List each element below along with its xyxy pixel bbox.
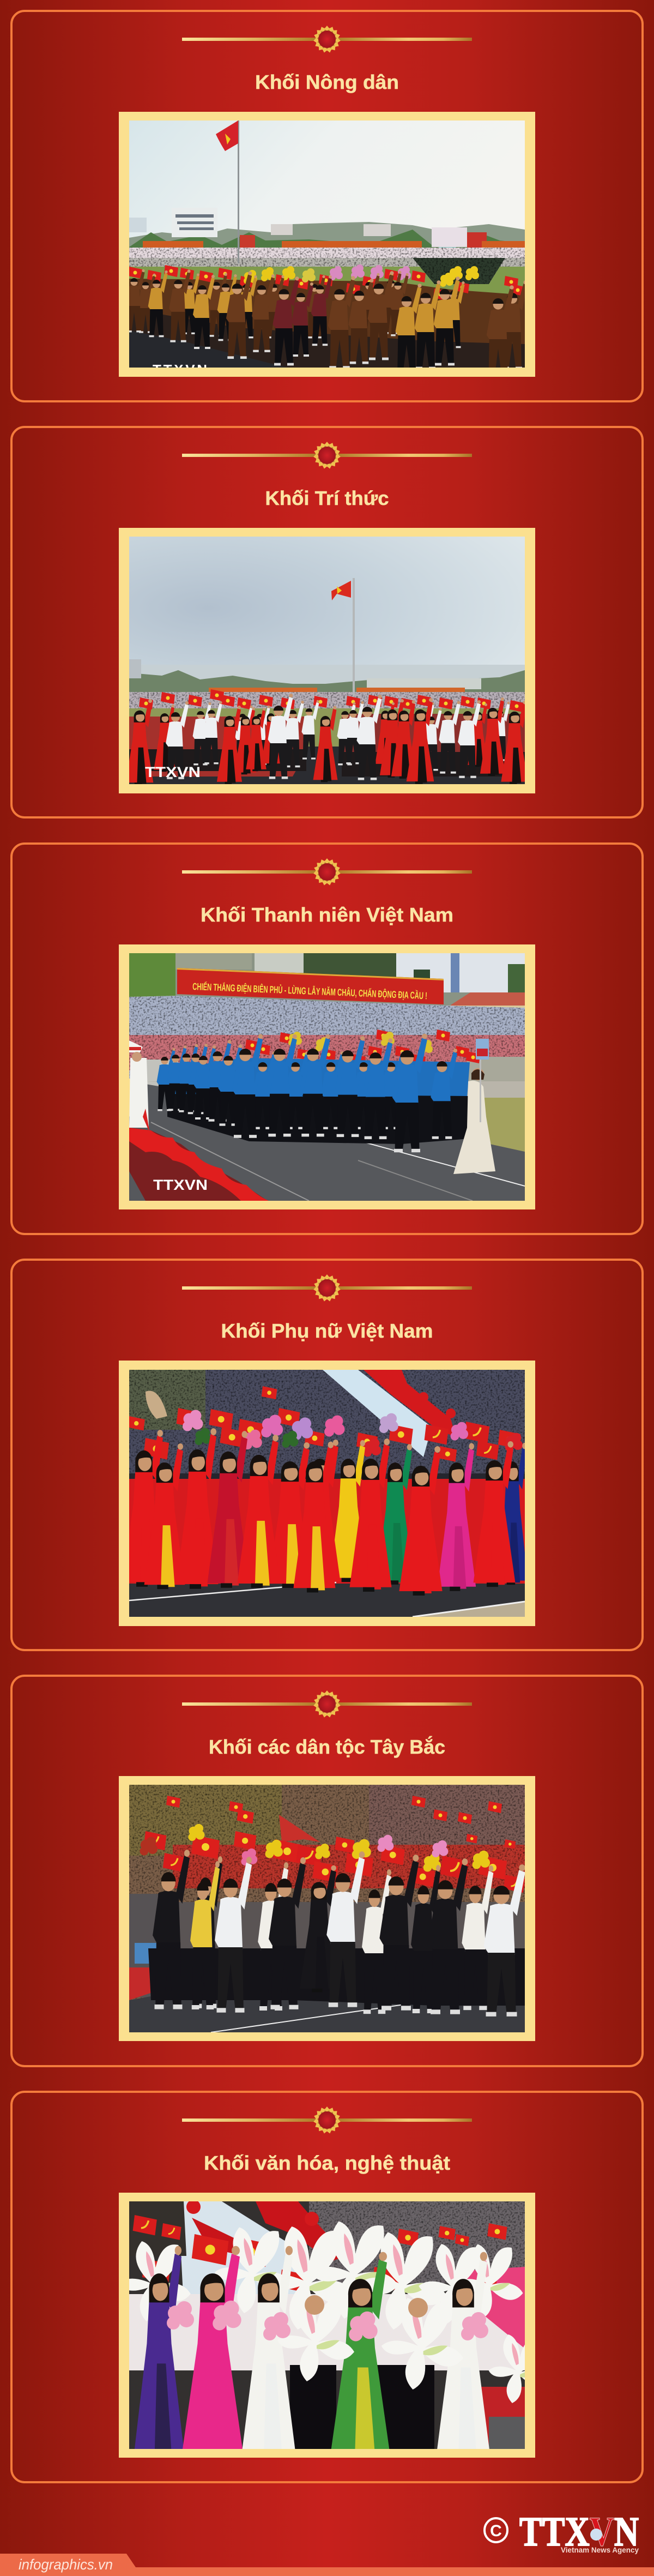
road xyxy=(129,1981,525,2032)
photo: women marching xyxy=(129,1370,525,1617)
dresses mass xyxy=(129,1479,525,1585)
stand ramp and drapery xyxy=(129,2200,347,2305)
photo frame xyxy=(119,1776,535,2041)
background costumes xyxy=(129,2294,525,2370)
ornament divider xyxy=(182,858,472,886)
parade ground xyxy=(129,708,525,747)
ornament divider xyxy=(182,1274,472,1302)
marchers xyxy=(126,694,528,785)
heading: Khối văn hóa, nghệ thuật xyxy=(204,2152,450,2174)
panel: Khối Phụ nữ Việt Nam xyxy=(11,1260,643,1650)
stand ramp and drapery xyxy=(323,1370,456,1457)
heading: Khối Phụ nữ Việt Nam xyxy=(221,1320,433,1342)
footer strip and tab: infographics.vn xyxy=(19,2556,113,2573)
marchers' mass xyxy=(162,1058,470,1098)
marchers xyxy=(153,1850,525,2017)
heading: Khối các dân tộc Tây Bắc xyxy=(209,1735,445,1758)
marchers' mass xyxy=(129,279,525,368)
photo: intellectuals marching xyxy=(129,537,525,784)
women xyxy=(135,2246,489,2457)
flags xyxy=(133,2215,507,2292)
costume flowers on skirts xyxy=(277,2296,550,2403)
footer strip and tab xyxy=(0,2554,654,2576)
marchers xyxy=(157,1034,457,1152)
banner xyxy=(177,968,444,1004)
flower barrier xyxy=(129,1128,269,1201)
flags and flowers xyxy=(245,1030,480,1066)
marchers' mass xyxy=(148,1948,525,2006)
path, grass and road xyxy=(146,1081,525,1103)
woman with sign xyxy=(453,1039,495,1174)
panel: Khối Nông dân xyxy=(11,11,643,401)
panel: Khối các dân tộc Tây Bắc xyxy=(11,1676,643,2066)
photo: northwest ethnic groups marching xyxy=(129,1785,525,2032)
photo frame xyxy=(119,528,535,793)
ornament divider xyxy=(182,442,472,469)
heading: Khối Thanh niên Việt Nam xyxy=(201,904,453,926)
ornament divider xyxy=(182,2106,472,2134)
heading: Khối Nông dân xyxy=(255,71,399,93)
ornament divider xyxy=(182,1690,472,1718)
flags xyxy=(139,689,524,712)
photo frame xyxy=(119,944,535,1209)
photo: culture and arts block xyxy=(129,2201,525,2449)
heads of two dancers xyxy=(305,2295,428,2318)
road xyxy=(129,1582,525,1617)
ornament divider xyxy=(182,26,472,53)
costume flowers xyxy=(119,2222,523,2330)
photo frame xyxy=(119,2193,535,2458)
photo watermark: TTXVN xyxy=(145,764,201,780)
logo: copyright TTXVN: Vietnam News Agency xyxy=(561,2545,639,2554)
panel: Khối Thanh niên Việt Nam xyxy=(11,844,643,1234)
photo watermark: TTXVN xyxy=(153,362,207,378)
logo: copyright TTXVN: TTXVN xyxy=(519,2509,639,2555)
marchers xyxy=(126,269,528,378)
logo: copyright TTXVN: C xyxy=(490,2522,502,2540)
panel: Khối văn hóa, nghệ thuật xyxy=(11,2092,643,2482)
photo frame xyxy=(119,1361,535,1626)
spectators' flags xyxy=(166,1796,516,1849)
pink umbrella xyxy=(440,2267,525,2349)
pole and flag xyxy=(331,578,355,696)
flags and flowers xyxy=(128,264,525,300)
pole and flag xyxy=(216,121,239,263)
marchers xyxy=(123,1428,528,1596)
black skirts xyxy=(290,2365,434,2449)
red flag on pole xyxy=(279,1815,320,1842)
photo watermark: TTXVN xyxy=(153,1177,208,1193)
crowd stand xyxy=(129,996,525,1079)
photo frame xyxy=(119,112,535,377)
bouquets xyxy=(167,2301,488,2342)
photo: farmers marching xyxy=(129,121,525,378)
heading: Khối Trí thức xyxy=(265,487,389,509)
panel: Khối Trí thức xyxy=(11,427,643,817)
flags and flowers xyxy=(128,1386,523,1462)
honor guard xyxy=(129,1040,150,1133)
flags and flowers xyxy=(140,1824,525,1893)
photo: youth marching xyxy=(129,953,525,1201)
marchers' mass xyxy=(129,717,306,777)
parade ground xyxy=(129,267,525,360)
